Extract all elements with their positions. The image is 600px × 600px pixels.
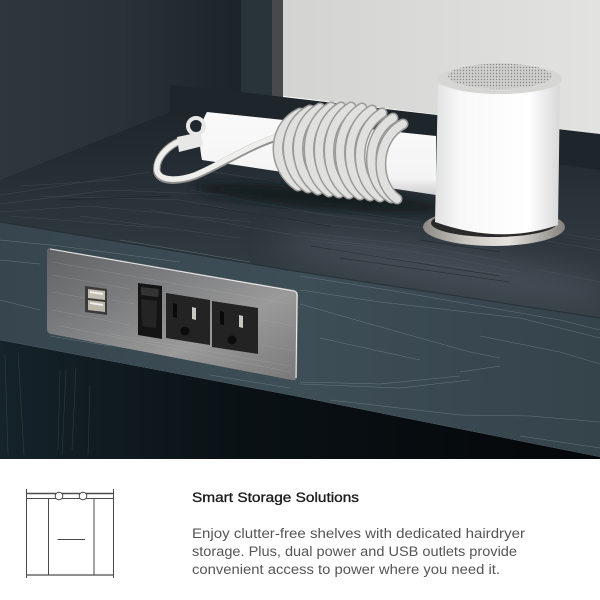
wood grain on shelf top — [0, 170, 600, 282]
plate top highlight — [50, 249, 297, 378]
dryer handle — [200, 112, 436, 195]
background: left cabinet wall — [0, 0, 242, 190]
dryer top rim — [438, 64, 562, 94]
dryer body — [435, 84, 560, 234]
cord strain relief — [177, 132, 203, 152]
dryer mesh vent — [448, 64, 552, 88]
coiled cord — [278, 107, 403, 199]
cabinet post — [241, 0, 273, 110]
light back wall — [283, 0, 600, 134]
icon: cabinet line drawing — [26, 489, 114, 578]
icon: outlet 1 — [166, 293, 210, 345]
white caption panel — [0, 459, 600, 600]
shelf top highlight — [269, 222, 600, 314]
power cord loop — [157, 136, 282, 180]
shelf front top edge — [0, 222, 600, 318]
body text: storage. Plus, dual power and USB outlets provide — [192, 544, 517, 559]
power plate — [47, 248, 298, 380]
shelf front face — [0, 222, 600, 457]
holder recess — [431, 209, 557, 237]
icon: rocker switch — [138, 283, 162, 339]
cord hanging loop — [188, 118, 204, 134]
body text: Enjoy clutter-free shelves with dedicated hairdryer — [192, 526, 526, 541]
brushed texture — [52, 262, 294, 372]
area below shelf — [0, 340, 600, 459]
contact shadow — [195, 177, 445, 219]
shelf back lip — [170, 85, 600, 175]
wood grain on front face — [0, 240, 600, 448]
body text: convenient access to power where you need it. — [192, 562, 500, 577]
shelf top surface — [0, 112, 600, 318]
body text — [192, 526, 526, 577]
cabinet post trim — [272, 0, 283, 110]
grain below shelf — [5, 352, 90, 455]
brushed steel plate — [47, 248, 298, 380]
icon: outlet 2 — [212, 301, 258, 354]
heading: Smart Storage Solutions — [192, 490, 359, 505]
hair dryer — [157, 64, 565, 246]
icon: USB ports — [85, 286, 107, 315]
photo: shelf scene — [0, 0, 600, 459]
steel holder ring — [423, 208, 565, 246]
